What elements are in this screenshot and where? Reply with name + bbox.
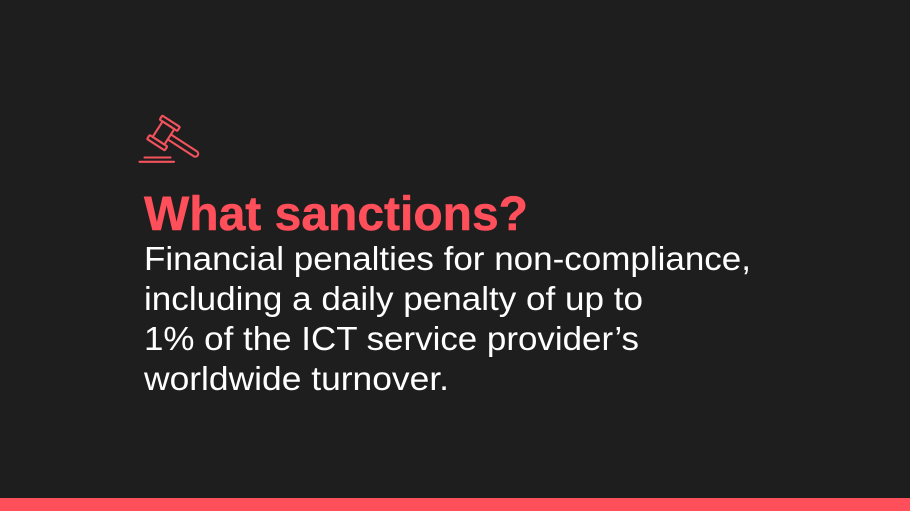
body text: 1% of the ICT service provider’s [144,321,639,358]
body text: including a daily penalty of up to [144,281,643,318]
body text: Financial penalties for non-compliance, [144,241,751,278]
body text [143,241,751,398]
icon: gavel [140,116,205,167]
title: What sanctions? [144,188,528,241]
bottom accent bar [0,498,910,511]
body text: worldwide turnover. [143,361,449,398]
